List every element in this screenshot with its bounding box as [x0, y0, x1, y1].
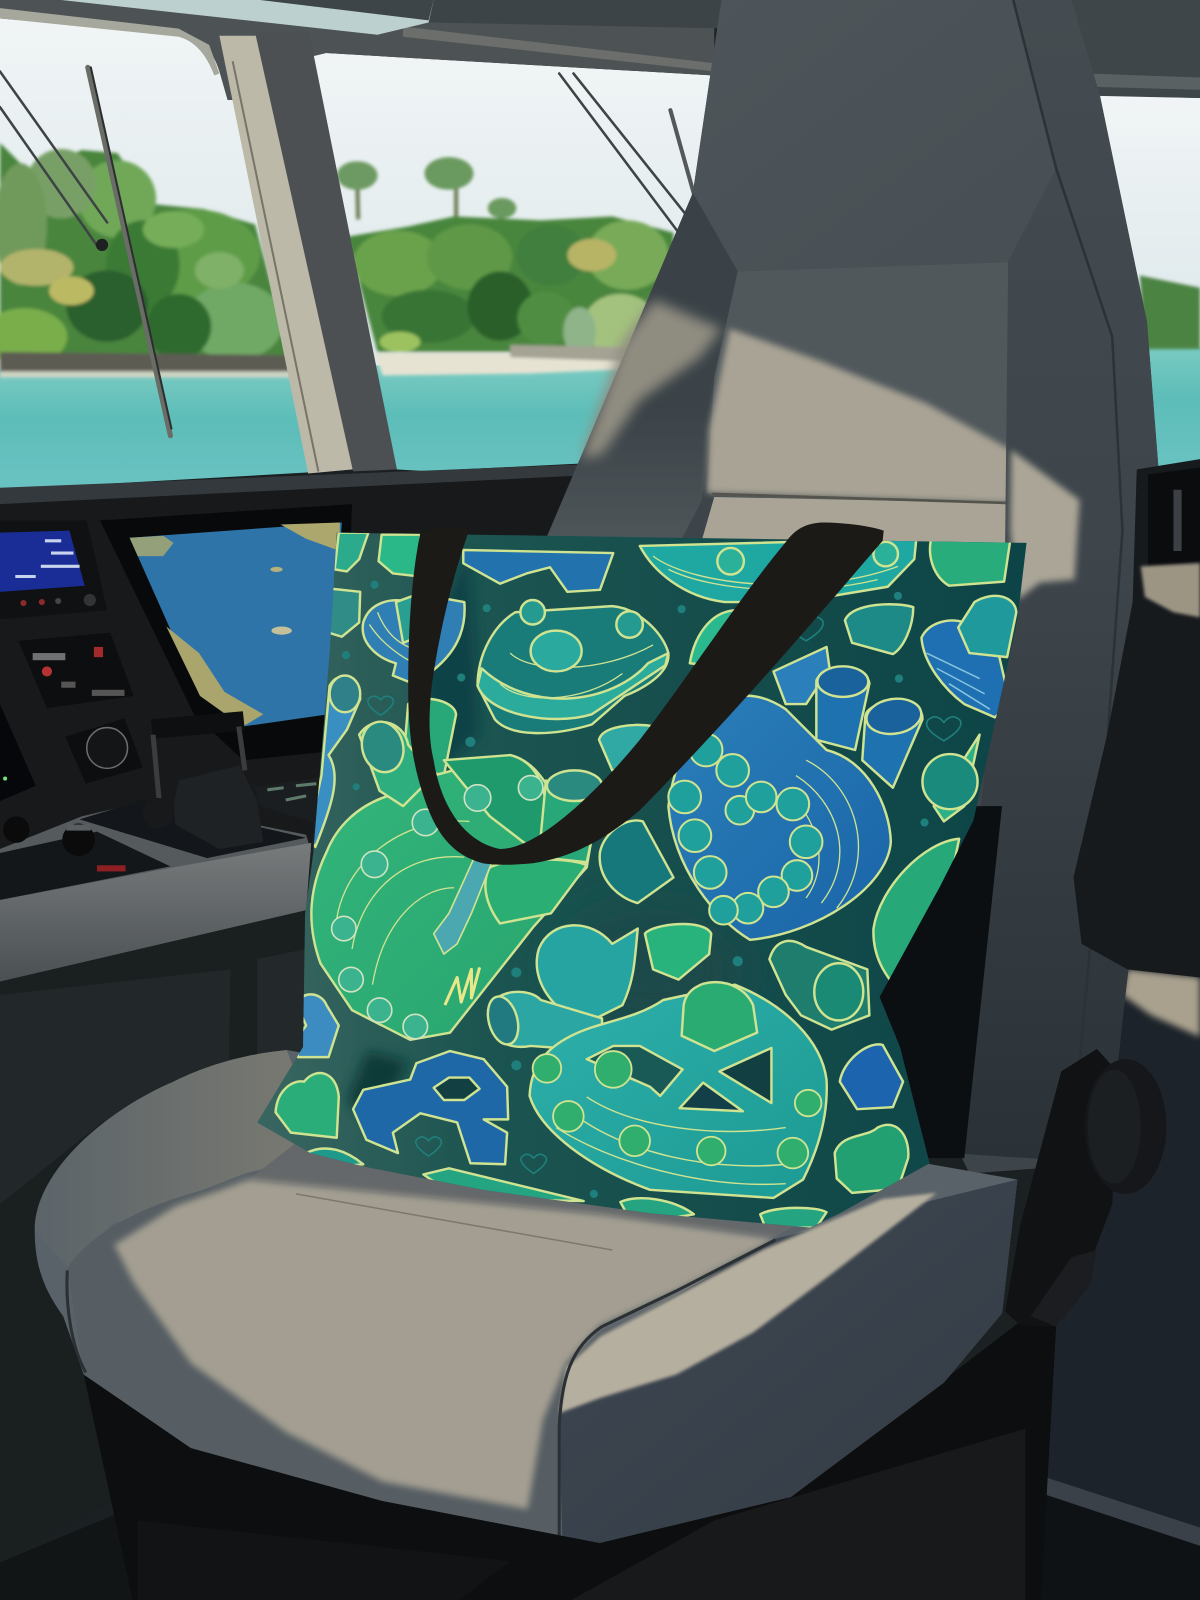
small mid green heart — [645, 924, 711, 980]
button panel — [18, 633, 134, 708]
big right green shape — [873, 839, 959, 995]
right bolster sunlit area — [1010, 450, 1080, 600]
palm trees — [353, 186, 460, 222]
blue heart body — [668, 696, 891, 940]
armrest — [1073, 459, 1200, 978]
big green heart — [311, 717, 602, 1040]
left seat bolster — [35, 1050, 294, 1242]
bottom right green heart — [835, 1125, 908, 1193]
window pillar — [219, 33, 397, 473]
seat adjustment knob — [1005, 1049, 1166, 1327]
cushion seam — [67, 1240, 776, 1536]
lower panel — [699, 497, 1007, 550]
blue nut — [840, 1044, 903, 1109]
window frames and roof — [0, 0, 1200, 100]
background dots and hearts — [342, 581, 929, 1198]
left blue tube — [308, 676, 360, 847]
blue heart tubes — [773, 647, 924, 788]
lower cabinet — [0, 910, 306, 1600]
pipe behind handle — [403, 699, 456, 776]
right bolster sunlit strip — [559, 1193, 937, 1413]
lower left screen — [0, 704, 36, 801]
left green heart — [276, 1073, 339, 1138]
left bolster — [541, 193, 738, 551]
front pad shadow — [70, 1191, 506, 1525]
left window view — [0, 18, 308, 488]
teal heart lobes — [483, 925, 638, 1051]
chart plotter screen — [100, 504, 352, 760]
right seat bolster — [559, 1180, 1017, 1543]
top teal arc — [640, 539, 916, 602]
top-left cups — [329, 533, 420, 637]
middle window view — [314, 53, 710, 471]
top-right cup — [930, 537, 1010, 586]
throttle levers — [143, 711, 263, 849]
dial panel — [65, 718, 143, 784]
windscreen wipers — [0, 67, 694, 436]
rear seat band — [249, 1143, 816, 1237]
rear keypad — [255, 778, 318, 822]
green piece behind handle — [688, 609, 734, 666]
seat backrest — [541, 0, 1158, 1173]
teal heart body — [530, 982, 827, 1198]
lower control deck — [0, 816, 170, 900]
left blue piece — [295, 994, 339, 1057]
small instrument display — [0, 520, 107, 619]
bottom edge pieces — [306, 1148, 827, 1228]
throttle lever base — [80, 800, 306, 858]
small teal heart — [599, 725, 655, 770]
right window view — [1100, 96, 1200, 466]
center panel — [707, 262, 1011, 503]
bolt — [769, 941, 869, 1030]
bag shadow — [878, 806, 1002, 1158]
mid dark heart — [600, 820, 673, 903]
headrest — [693, 0, 1056, 271]
right door panel — [1020, 969, 1200, 1600]
seat cushion — [35, 1050, 1017, 1543]
bag pattern — [276, 533, 1016, 1228]
left bolster sunlit band — [582, 300, 721, 459]
blue stacked heart left — [363, 594, 465, 684]
centre teal heart — [478, 600, 668, 733]
blue R-shaped nut — [353, 1051, 508, 1164]
outer backrest shell — [541, 0, 1158, 1173]
blue stack with nut — [921, 596, 1016, 717]
center panel sunlit area — [707, 329, 1011, 503]
small cube heart — [845, 604, 913, 654]
front pad sunlit area — [114, 1180, 776, 1509]
bag handle — [408, 522, 884, 865]
dark fabric shading — [711, 946, 723, 981]
right bolster — [949, 0, 1158, 1163]
blue wrench top — [463, 550, 613, 592]
bag body — [257, 533, 1027, 1228]
helm console — [0, 463, 587, 906]
console fascia — [0, 843, 311, 982]
tote bag — [257, 533, 1027, 1228]
console top surface — [0, 802, 311, 906]
right edge cup — [922, 735, 980, 821]
seat base — [84, 1321, 1056, 1600]
